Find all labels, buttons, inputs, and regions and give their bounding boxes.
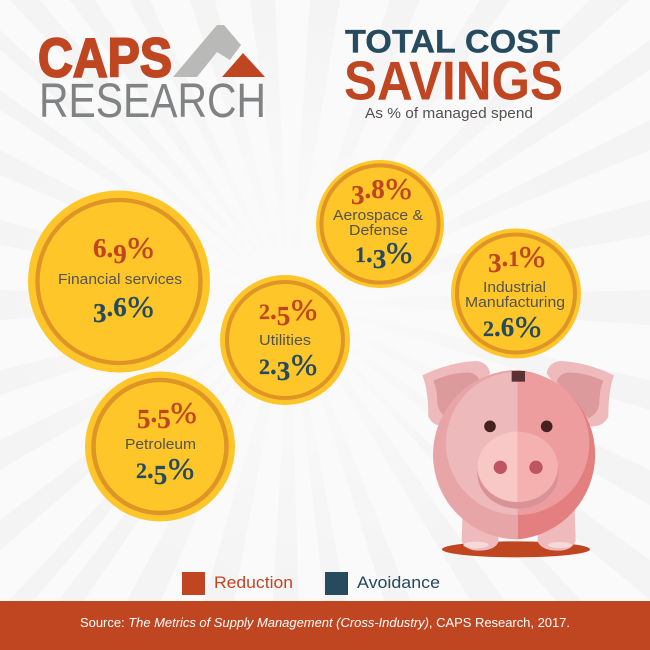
circle: Financial services: Financial services (58, 271, 182, 288)
circle: Utilities (220, 275, 350, 405)
legend: Reduction (182, 572, 293, 595)
pig face (446, 372, 589, 515)
circle: Petroleum: 5 (157, 404, 171, 434)
circle: Aerospace and Defense: 3 (351, 180, 364, 210)
legend (182, 572, 440, 595)
legend: Avoidance: Avoidance (357, 573, 440, 592)
circle: Aerospace and Defense: Aerospace & (333, 207, 423, 224)
circle: Aerospace and Defense: .8 (364, 174, 385, 204)
footer source bar: Source: The Metrics of Supply Management (Cross-Industry), CAPS Research, 2017. (80, 615, 570, 630)
circle: Industrial Manufacturing: 2.6 (483, 312, 514, 342)
circle: Utilities: % (291, 292, 317, 327)
circle: Utilities: Utilities (259, 332, 311, 349)
circle: Aerospace and Defense (316, 160, 444, 288)
title (344, 24, 563, 122)
circle: Financial services: % (128, 230, 154, 265)
title line: Savings: SAVINGS (344, 50, 563, 112)
circle: Petroleum (85, 372, 235, 522)
circle: Petroleum: Petroleum (125, 436, 196, 453)
title line: Total Cost: TOTAL COST (345, 24, 560, 60)
pig slot (512, 371, 525, 382)
circle: Financial services (28, 190, 210, 372)
pig snout (477, 432, 559, 509)
pig body (433, 370, 595, 539)
subtitle: As % of managed spend (365, 105, 533, 122)
logo: CAPS Research (38, 25, 266, 128)
icon: piggy bank (422, 361, 614, 557)
legend: Avoidance (325, 572, 440, 595)
pig eyes (484, 420, 552, 432)
circle: Utilities: % (291, 347, 317, 382)
circle: Petroleum: % (171, 395, 197, 430)
pig legs (462, 510, 576, 551)
circle: Industrial Manufacturing: 1 (508, 246, 519, 271)
circle: Aerospace and Defense: 1. (355, 238, 373, 268)
logo wordmark: CAPS: CAPS (38, 26, 172, 88)
circle: Aerospace and Defense: % (386, 171, 412, 206)
logo mountain icon (173, 25, 265, 77)
circle: Industrial Manufacturing: . (502, 242, 508, 272)
circle: Financial services: 9 (113, 239, 127, 269)
circle: Utilities: 3 (277, 356, 290, 386)
circle: Industrial Manufacturing: Industrial (483, 279, 546, 296)
circle: Petroleum: . (150, 398, 157, 428)
circle: Utilities: 2. (259, 350, 277, 380)
circle: Utilities: 2. (259, 295, 277, 325)
circle: Utilities: 5 (277, 301, 290, 331)
circle: Financial services: .6 (106, 292, 127, 322)
circle: Petroleum: 5 (154, 460, 167, 490)
pig ears (422, 361, 614, 426)
circle: Industrial Manufacturing: Manufacturing (465, 294, 565, 311)
circle: Financial services: 6. (93, 233, 113, 263)
footer source bar (0, 601, 650, 650)
circle: Petroleum: % (168, 451, 194, 486)
circle: Industrial Manufacturing (451, 228, 581, 358)
circle: Industrial Manufacturing: 3 (488, 248, 502, 278)
circle: Aerospace and Defense: % (386, 235, 412, 270)
circle: Financial services: 3 (93, 298, 106, 328)
circle: Petroleum: 5 (137, 404, 150, 434)
circle: Aerospace and Defense: Defense (349, 222, 408, 239)
circle: Financial services: % (128, 289, 154, 324)
logo wordmark: Research: RESEARCH (39, 75, 266, 128)
pig shadow (442, 541, 590, 557)
circle: Petroleum: 2. (136, 454, 154, 484)
circle: Industrial Manufacturing: % (519, 239, 545, 274)
circle: Aerospace and Defense: 3 (373, 244, 386, 274)
circle: Industrial Manufacturing: % (515, 309, 541, 344)
legend: Reduction: Reduction (214, 573, 293, 592)
